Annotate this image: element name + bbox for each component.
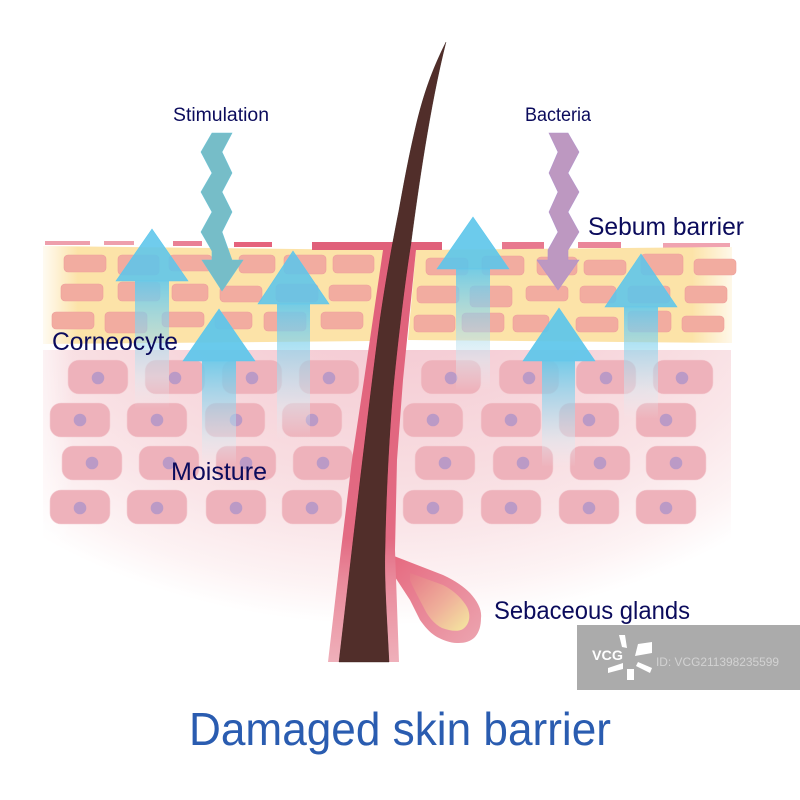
- hair follicle with upper collar: [312, 242, 442, 662]
- arrow: moisture 6: [605, 254, 677, 419]
- hair shaft: [339, 42, 446, 662]
- arrow: moisture 2: [258, 251, 329, 440]
- sebaceous gland: [394, 556, 481, 643]
- panel: stratum corneum yellow band left: [43, 246, 384, 344]
- label: Corneocyte: Corneocyte: [52, 328, 178, 356]
- label: Bacteria: Bacteria: [525, 105, 591, 126]
- corneocytes left: [52, 255, 374, 333]
- arrow: moisture 5: [523, 308, 595, 467]
- panel: stratum corneum yellow band right: [408, 247, 732, 343]
- panel: sebum barrier dashes: [45, 241, 730, 250]
- arrow: moisture 1: [116, 229, 188, 409]
- epidermal cells left: [50, 360, 359, 524]
- watermark badge: ID: VCG211398235599: [656, 655, 779, 669]
- arrow: moisture 4: [437, 217, 509, 391]
- label: Stimulation: Stimulation: [173, 105, 269, 126]
- watermark badge: [577, 625, 800, 690]
- title: Damaged skin barrier: [189, 703, 611, 755]
- label: Sebaceous glands: Sebaceous glands: [494, 597, 690, 625]
- arrow: bacteria zigzag: [537, 133, 579, 290]
- epidermal cells right: [403, 360, 713, 524]
- arrow: stimulation zigzag: [201, 133, 243, 291]
- arrow: moisture 3: [183, 309, 255, 467]
- panel: dermis pink background: [43, 350, 731, 630]
- label: Sebum barrier: Sebum barrier: [588, 213, 744, 241]
- corneocytes right: [414, 254, 736, 332]
- label: Moisture: Moisture: [171, 458, 267, 486]
- watermark badge: VCG: [592, 648, 623, 663]
